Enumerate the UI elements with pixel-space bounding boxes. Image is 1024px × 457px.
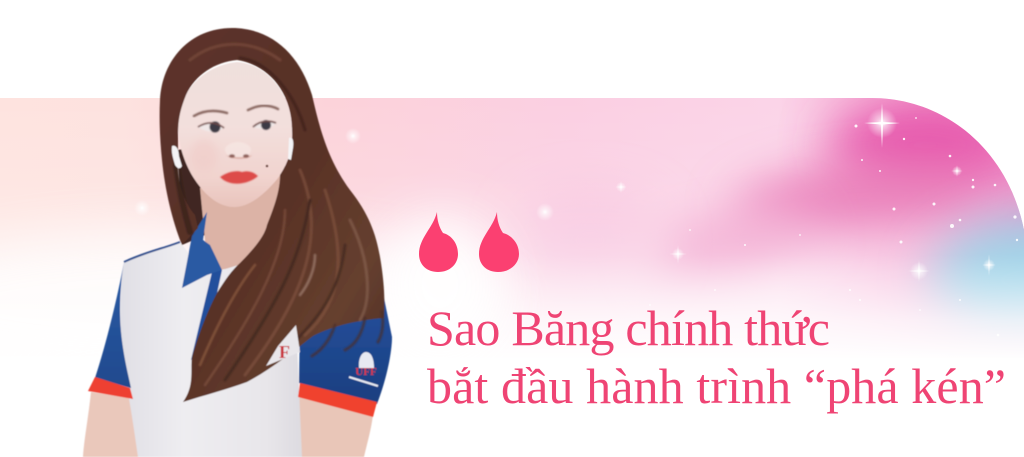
white shirt body (120, 242, 302, 457)
earbuds (172, 138, 293, 168)
left arm (83, 392, 142, 457)
right blue sleeve (299, 298, 392, 404)
sparkles: medium stars (134, 128, 996, 282)
shirt shoulder piping (124, 242, 180, 262)
lips (220, 171, 258, 184)
sleeve logo: UFF (355, 366, 377, 378)
back hair (178, 130, 285, 245)
mole (266, 165, 268, 167)
blue collar (182, 212, 222, 288)
right red cuff (298, 383, 377, 417)
gradient background panel (0, 98, 1024, 342)
left red cuff (88, 377, 133, 399)
hair (160, 28, 384, 402)
eyebrows (194, 106, 278, 116)
shirt wedge with chest lettering: F (279, 342, 290, 362)
portrait: woman in polo shirt (83, 28, 392, 457)
hair tips over sleeve (312, 312, 383, 356)
quote mark icon (419, 212, 519, 272)
face (178, 62, 292, 207)
white glow behind quote mark (389, 204, 502, 286)
left blue sleeve (95, 262, 131, 388)
sparkles: small dots (649, 117, 1018, 336)
sparkle: large top right (864, 103, 900, 148)
right arm (292, 395, 373, 457)
star field (134, 103, 1018, 336)
blue placket (191, 270, 222, 360)
neck (200, 170, 288, 272)
cheek shading (190, 139, 218, 171)
facial features (190, 106, 278, 184)
sleeve logo (349, 352, 378, 386)
headline quote text: bắt đầu hành trình “phá kén” (427, 358, 1006, 414)
headline quote text: Sao Băng chính thức (427, 300, 830, 356)
eyes (198, 120, 276, 132)
shirt wedge with chest lettering (266, 325, 300, 366)
nose (225, 142, 252, 159)
